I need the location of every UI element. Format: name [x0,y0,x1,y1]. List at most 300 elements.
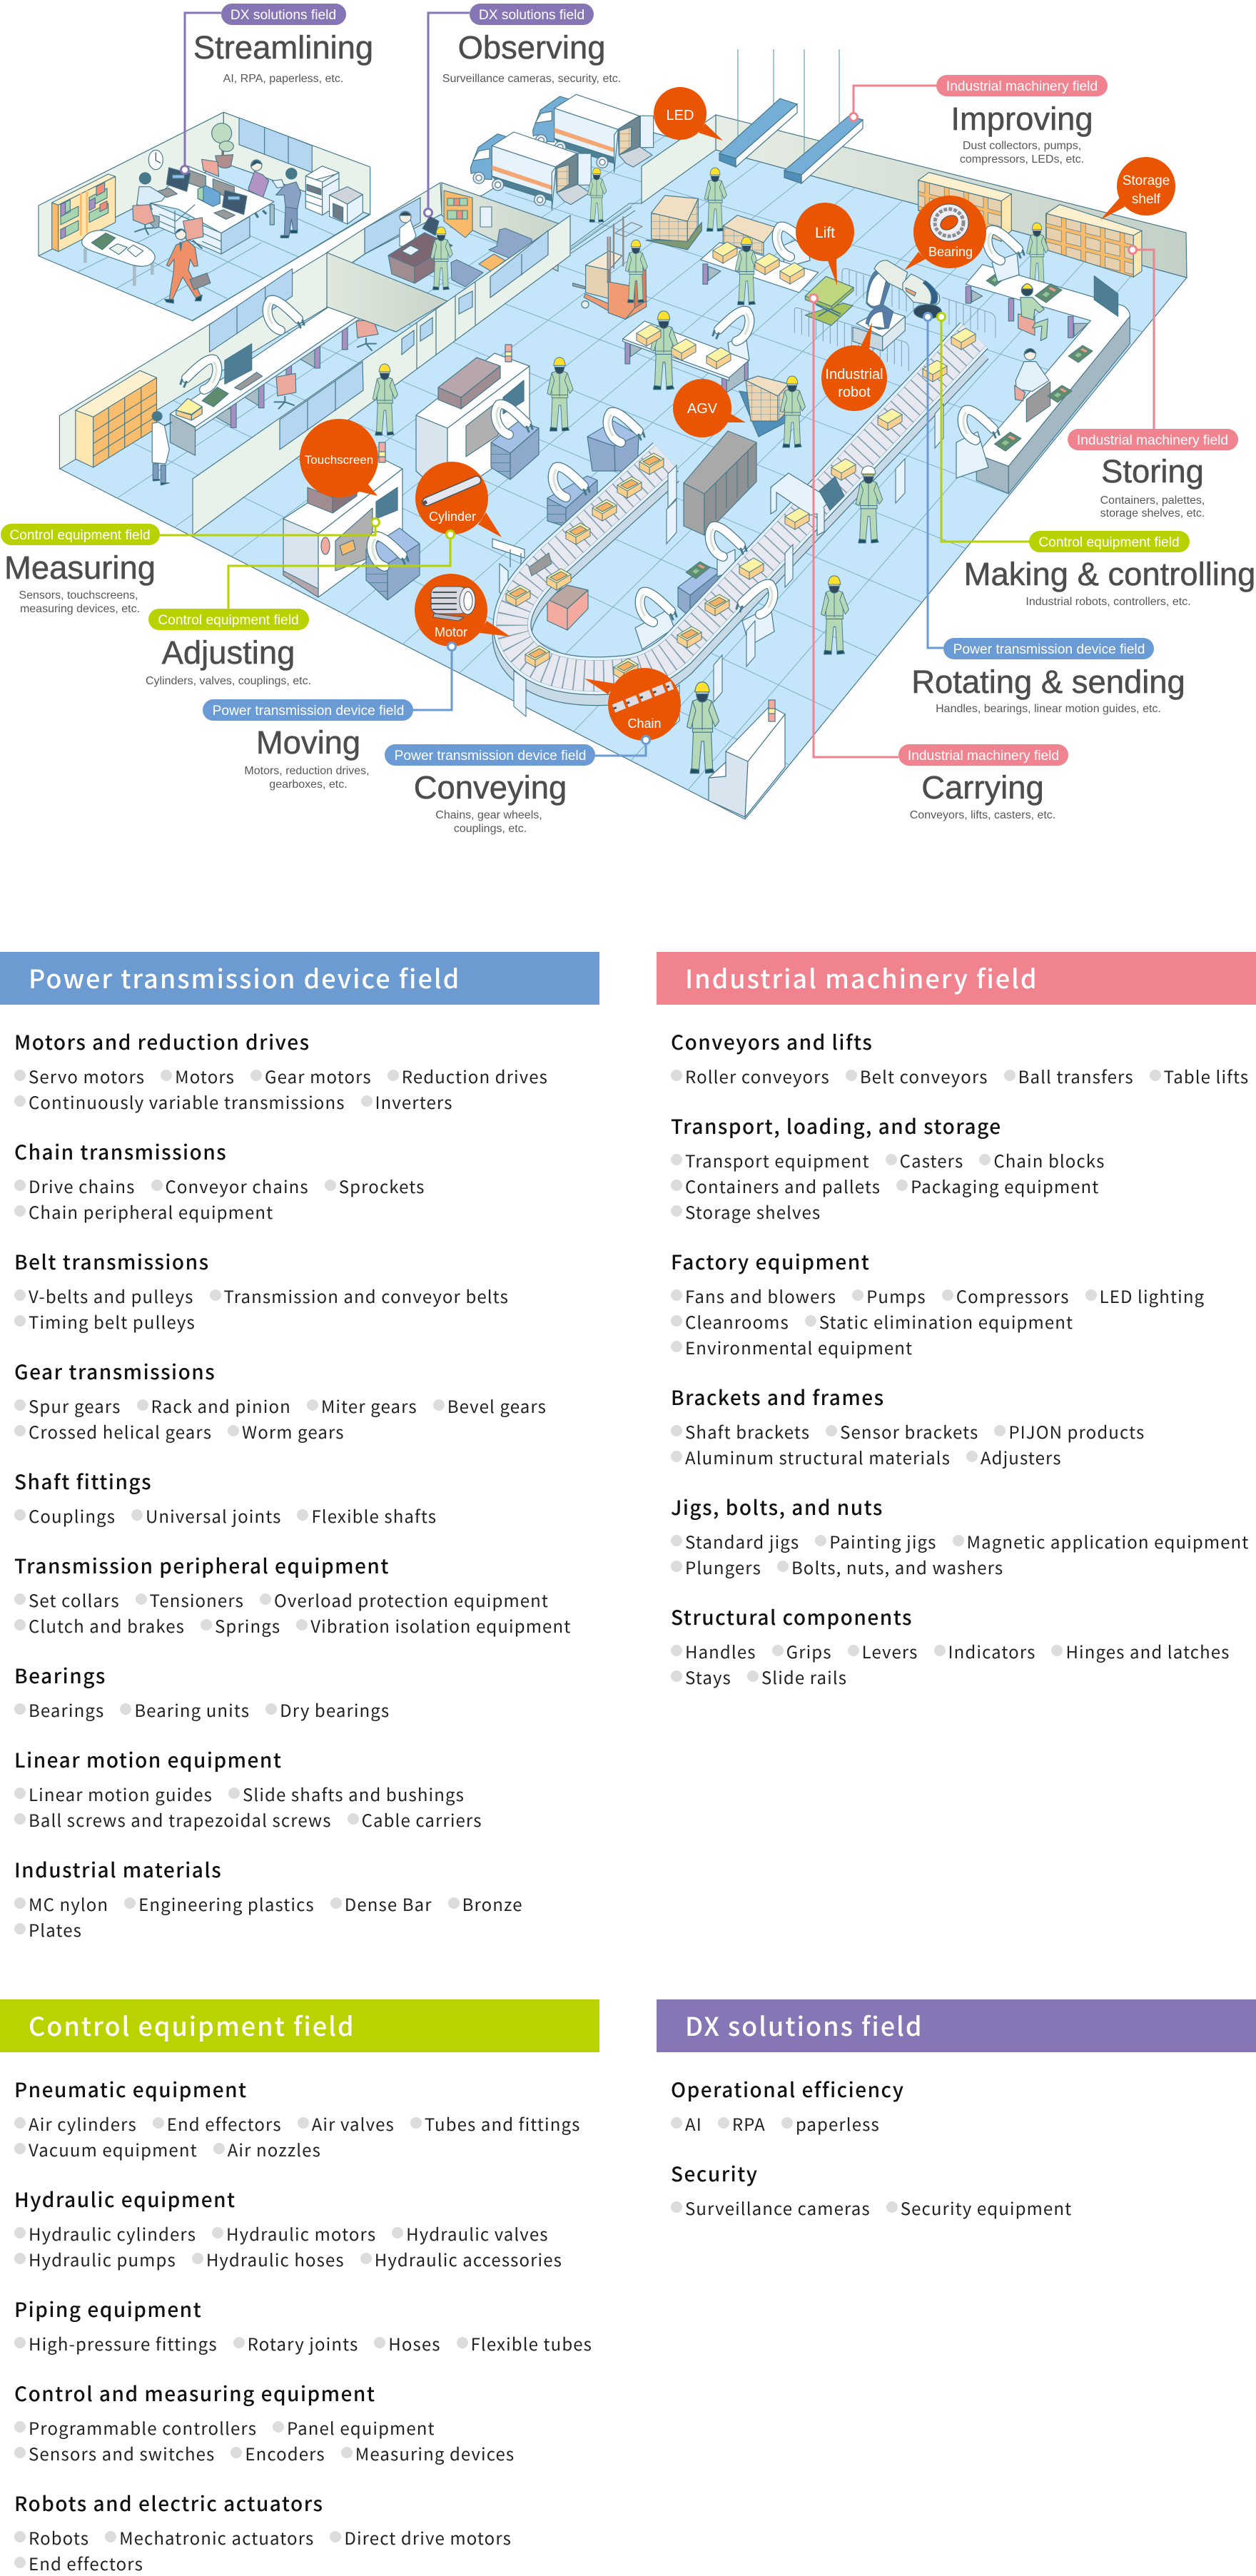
group: Transport, loading, and storage: Transport equipment [685,1147,870,1172]
group: Transport, loading, and storage: Packaging equipment [911,1173,1099,1198]
heading band: Industrial machinery field: Industrial machinery field [685,959,1038,996]
group: Pneumatic equipment: Tubes and fittings [425,2111,580,2136]
label: Adjusting: Adjusting [162,634,295,671]
group: Conveyors and lifts: Conveyors and lifts [671,1028,873,1056]
machine lower [283,457,402,597]
factory illustration [1,4,1255,835]
group: Motors and reduction drives: Continuously variable transmissions [29,1089,345,1114]
back wall [716,115,1187,278]
office walls [39,112,223,256]
group: Brackets and frames: Adjusters [981,1444,1062,1469]
sensor bar [492,539,525,599]
PCB stack stand [678,566,721,617]
label: Rotating and sending: Handles, bearings, linear motion guides, etc. [936,703,1161,715]
group: Jigs, bolts, and nuts: Painting jigs [829,1528,937,1553]
group: Motors and reduction drives [14,1028,548,1114]
label: Rotating and sending [911,638,1185,715]
group: Bearings: Bearing units [134,1697,250,1722]
callout: Chain [584,668,681,741]
copier [305,166,339,215]
worker in manager room [430,227,452,290]
board [1035,284,1062,303]
group: Chain transmissions: Sprockets [339,1173,425,1198]
group: Hydraulic equipment: Hydraulic valves [406,2221,549,2246]
label: Storing: Industrial machinery field [1077,433,1228,448]
callout: LED: LED [667,108,694,123]
front console [709,700,785,817]
lab arm 2 [181,359,217,390]
box [706,348,731,369]
group: Jigs, bolts, and nuts [671,1493,1249,1579]
group: Hydraulic equipment: Hydraulic equipment [14,2185,236,2214]
lab wall with doors [193,215,570,535]
loading bay wall [642,115,716,203]
pallet stack 2 [723,215,776,255]
label: Storing [1068,429,1238,519]
man in shirt [1015,349,1049,401]
group: Gear transmissions: Crossed helical gears [29,1419,212,1444]
plant [212,123,233,168]
group: Brackets and frames: Sensor brackets [840,1419,978,1444]
callout: Chain: Chain [627,716,662,731]
sample box [176,398,202,420]
group: Motors and reduction drives: Gear motors [265,1063,372,1088]
group: Chain transmissions: Chain transmissions [14,1137,227,1166]
label: Streamlining: DX solutions field [231,8,336,23]
group: Jigs, bolts, and nuts: Jigs, bolts, and nuts [671,1493,883,1521]
delivery trucks [470,94,654,210]
callout: LED [654,87,723,141]
group: Structural components: Indicators [948,1638,1035,1663]
callout: Lift: Lift [815,225,835,241]
office front edge [192,214,370,321]
industrial robot [866,260,941,330]
bookshelf [52,174,116,252]
label: Moving: Moving [256,724,360,761]
bookshelf [444,191,472,238]
group: Jigs, bolts, and nuts: Standard jigs [685,1528,799,1553]
arm [553,467,589,497]
callout: Storage shelf [1100,157,1175,220]
group: Gear transmissions: Spur gears [29,1393,121,1418]
group: Hydraulic equipment: Hydraulic cylinders [29,2221,196,2246]
label: Measuring: measuring devices, etc. [20,603,140,615]
heading band: Industrial machinery field [657,952,1256,1005]
wall panel [480,207,492,227]
arm [736,584,773,614]
group: Transmission peripheral equipment: Vibration isolation equipment [310,1613,571,1638]
group: Robots and electric actuators: Mechatronic actuators [119,2525,314,2550]
monitor [157,168,191,198]
label: Observing: Observing [458,29,605,66]
group: Brackets and frames: Shaft brackets [685,1419,810,1444]
group: Factory equipment: Cleanrooms [685,1309,789,1334]
table A [623,321,749,392]
office window [239,118,312,173]
bench boards [986,271,1007,286]
desks [151,166,274,254]
callout: Touchscreen: Touchscreen [305,453,373,467]
crop area: shelves, workbench, robot [918,173,1142,277]
group: Transport, loading, and storage: Containers and pallets [685,1173,881,1198]
group: Piping equipment: High-pressure fittings [29,2331,218,2356]
box [614,659,638,680]
sofa front [451,260,483,287]
box [739,558,764,579]
heading band: DX solutions field [657,1999,1256,2052]
label: Carrying: Industrial machinery field [908,749,1059,764]
lab back wall [59,252,328,469]
group: Hydraulic equipment: Hydraulic motors [226,2221,376,2246]
group: Robots and electric actuators: Robots and electric actuators [14,2489,324,2517]
label: Improving: Improving [951,101,1093,137]
group: Belt transmissions: V-belts and pulleys [29,1283,194,1308]
office room [39,112,370,320]
group: Industrial materials [14,1855,523,1942]
group: Security [671,2159,1072,2220]
heading band: Power transmission device field [0,952,599,1005]
group: Security: Security equipment [901,2195,1072,2220]
group: Belt transmissions: Transmission and conveyor belts [224,1283,509,1308]
gantry [771,473,844,535]
group: Factory equipment: Pumps [866,1283,926,1308]
box [713,242,737,263]
robot pedestal [853,309,905,351]
callout: Industrial robot: Industrial [825,367,883,382]
group: Transport, loading, and storage: Chain blocks [993,1147,1105,1172]
callout: Industrial robot: robot [838,385,871,400]
group: Hydraulic equipment: Hydraulic pumps [29,2246,176,2271]
conveyor legs [514,404,943,728]
group: Industrial materials: Engineering plastics [138,1891,315,1916]
bench [170,296,370,455]
roller conveyor [512,335,974,686]
lab robot arms [268,300,304,330]
group: Control and measuring equipment: Measuring devices [355,2440,515,2465]
group: Operational efficiency [671,2075,904,2136]
group: Security: Security [671,2159,759,2188]
board [995,432,1021,451]
label: Adjusting: Control equipment field [158,613,299,628]
group: Linear motion equipment: Linear motion guides [29,1781,213,1806]
server racks [684,431,756,535]
label: Improving: Dust collectors, pumps, [963,140,1081,152]
L bench legs [966,287,1073,338]
callout: Bearing [904,196,986,270]
group: Motors and reduction drives: Servo motors [29,1063,145,1088]
group: Transmission peripheral equipment [14,1551,571,1638]
manager room walls [327,183,558,280]
center monitors [189,170,234,200]
label: Conveying: Chains, gear wheels, [435,809,542,821]
shelf left [918,173,1011,241]
label: Improving [936,75,1108,166]
group: Robots and electric actuators: End effectors [29,2550,143,2575]
worker at table B [735,237,759,305]
label: Making and controlling: Control equipment field [1038,535,1180,550]
group: Control and measuring equipment: Control and measuring equipment [14,2379,375,2408]
group: Gear transmissions: Bevel gears [447,1393,547,1418]
binders [198,186,220,206]
arm [372,536,408,567]
callout: Motor: Motor [435,625,467,639]
storage cabinet [76,370,156,467]
group: Robots and electric actuators [14,2489,512,2575]
group: Control and measuring equipment: Panel equipment [287,2415,435,2440]
group: Brackets and frames: Aluminum structural materials [685,1444,951,1469]
label: Streamlining [193,4,373,85]
label: Improving: compressors, LEDs, etc. [960,153,1084,166]
group: Linear motion equipment: Slide shafts and bushings [243,1781,465,1806]
group: Factory equipment: Static elimination equipment [819,1309,1073,1334]
PCB stack [686,562,710,579]
group: Structural components: Hinges and latches [1065,1638,1230,1663]
group: Motors and reduction drives: Reduction drives [402,1063,548,1088]
group: Jigs, bolts, and nuts: Plungers [685,1554,761,1579]
list: DX solutions field [671,2075,1072,2220]
group: Linear motion equipment [14,1745,482,1832]
arm [988,230,1024,260]
group: Chain transmissions: Drive chains [29,1173,136,1198]
list: Power transmission device field [14,1028,571,1942]
label: Conveying: Conveying [414,769,567,806]
pink bin [547,585,588,630]
group: Transport, loading, and storage: Casters [900,1147,963,1172]
callout: Cylinder [415,462,502,537]
manager [400,211,416,246]
group: Transport, loading, and storage [671,1112,1105,1224]
label: Carrying: Conveyors, lifts, casters, etc. [910,809,1055,821]
group: Robots and electric actuators: Robots [29,2525,89,2550]
box [566,523,590,544]
group: Factory equipment: Environmental equipment [685,1334,913,1359]
arm [963,410,999,440]
man in orange suit [165,229,211,303]
label: Carrying [898,744,1068,821]
arm [710,526,746,557]
group: Robots and electric actuators: Direct drive motors [344,2525,512,2550]
box [617,477,642,498]
group: Control and measuring equipment: Sensors and switches [29,2440,215,2465]
group: Motors and reduction drives: Motors [175,1063,235,1088]
label: Carrying: Carrying [921,769,1044,806]
callout: AGV [673,379,746,437]
label: Adjusting [146,609,311,687]
machines [283,235,1019,649]
label: Making and controlling [964,531,1255,608]
group: Structural components: Stays [685,1664,731,1689]
lab window [210,269,293,352]
blue machine [491,421,539,480]
group: Hydraulic equipment: Hydraulic hoses [206,2246,345,2271]
group: Control and measuring equipment [14,2379,515,2465]
fence [794,268,996,371]
group: Factory equipment: Fans and blowers [685,1283,836,1308]
group: Factory equipment: Compressors [956,1283,1070,1308]
main factory floor [60,125,1187,819]
desk [388,233,452,283]
label: Conveying: couplings, etc. [454,823,527,835]
group: Control and measuring equipment: Encoders [245,2440,325,2465]
group: Pneumatic equipment [14,2075,580,2161]
group: Bearings: Dry bearings [280,1697,390,1722]
group: Factory equipment: Factory equipment [671,1247,870,1276]
callout: Storage shelf: shelf [1132,192,1161,207]
monitor [225,344,263,390]
meeting table [82,230,155,286]
group: Transport, loading, and storage: Storage shelves [685,1199,821,1224]
front chair [183,218,203,248]
callout: Motor [415,574,510,646]
group: Motors and reduction drives: Motors and reduction drives [14,1028,310,1056]
label: Observing: DX solutions field [479,8,584,23]
group: Belt transmissions: Belt transmissions [14,1247,210,1276]
group: Bearings: Bearings [29,1697,104,1722]
lab room [59,252,378,485]
forklift driver [625,240,647,303]
gray pusher [529,553,552,576]
group: Shaft fittings: Flexible shafts [311,1503,437,1528]
group: Pneumatic equipment: End effectors [167,2111,282,2136]
box [923,360,947,382]
pale pedestals [635,549,774,649]
clock [148,150,163,170]
heading band: Control equipment field [0,1999,599,2052]
group: Conveyors and lifts: Table lifts [1164,1063,1249,1088]
heading band: Power transmission device field: Power transmission device field [29,959,460,996]
callout: Industrial robot [821,323,887,411]
group: Gear transmissions [14,1357,547,1444]
bench legs [231,323,348,427]
group: Operational efficiency: paperless [796,2111,880,2136]
worker with tablet [373,364,397,435]
label: Measuring: Control equipment field [9,528,151,543]
group: Piping equipment: Flexible tubes [471,2331,592,2356]
group: Linear motion equipment: Linear motion equipment [14,1745,282,1774]
group: Pneumatic equipment: Air cylinders [29,2111,137,2136]
group: Chain transmissions [14,1137,425,1224]
blue machine [587,421,639,471]
forklift [573,216,647,319]
callout: AGV: AGV [687,401,718,417]
box [878,409,902,430]
board [202,387,228,407]
callout: Touchscreen [300,419,378,497]
group: Conveyors and lifts: Ball transfers [1018,1063,1134,1088]
label: Improving: Industrial machinery field [946,79,1098,94]
orange low table [479,254,505,271]
group: Pneumatic equipment: Air nozzles [228,2136,321,2161]
shredder [330,187,363,224]
group: Structural components: Handles [685,1638,756,1663]
arm [608,412,644,442]
group: Piping equipment: Hoses [388,2331,441,2356]
box [677,627,702,648]
label: Storing: Storing [1101,453,1204,490]
board [1068,345,1093,362]
label: Rotating and sending: Power transmission device field [953,642,1145,657]
group: Transport, loading, and storage: Transport, loading, and storage [671,1112,1002,1140]
group: Linear motion equipment: Ball screws and trapezoidal screws [29,1807,332,1832]
worker white helmet [856,466,883,543]
arm [777,226,814,257]
group: Piping equipment: Rotary joints [248,2331,358,2356]
table B [701,243,819,293]
worker inspector [547,358,573,431]
group: Belt transmissions [14,1247,509,1334]
callout: Bearing: Bearing [928,245,973,259]
label: Measuring: Sensors, touchscreens, [19,589,138,602]
group: Structural components: Grips [786,1638,832,1663]
label: Moving: Motors, reduction drives, [244,765,370,777]
arm [640,592,677,622]
falling box [547,569,571,590]
worker at shelf [1026,223,1048,285]
laptop [422,216,439,235]
seated man [133,173,166,235]
group: Structural components [671,1603,1230,1689]
worker at truck [587,168,607,222]
worker front [687,682,719,774]
L bench [966,265,1130,494]
label: Observing [442,4,621,85]
box [755,253,779,275]
blue machine [547,476,597,527]
callout: Cylinder: Cylinder [429,509,476,524]
label: Measuring [1,524,160,615]
group: Jigs, bolts, and nuts: Magnetic application equipment [967,1528,1249,1553]
group: Structural components: Structural components [671,1603,913,1631]
boxes on tables [637,325,661,346]
office floor [39,163,370,320]
heading band: Control equipment field: Control equipment field [29,2007,355,2044]
group: Pneumatic equipment: Vacuum equipment [29,2136,198,2161]
group: Industrial materials: Industrial materials [14,1855,222,1884]
group: Pneumatic equipment: Air valves [312,2111,395,2136]
group: Shaft fittings: Universal joints [146,1503,281,1528]
group: Conveyors and lifts [671,1028,1249,1088]
group: Operational efficiency: AI [685,2111,702,2136]
truck rear [533,94,654,172]
label: Observing: Surveillance cameras, security, etc. [442,73,621,85]
box [951,328,976,350]
sofa back [489,228,532,260]
LED lights [719,49,863,183]
box [506,585,530,607]
back chair [202,159,219,176]
group: Brackets and frames [671,1383,1145,1469]
group: Industrial materials: Bronze [462,1891,523,1916]
group: Transmission peripheral equipment: Transmission peripheral equipment [14,1551,390,1580]
group: Transmission peripheral equipment: Clutch and brakes [29,1613,185,1638]
conveyor boxes [639,453,664,475]
label: Storing: storage shelves, etc. [1100,507,1205,519]
group: Industrial materials: MC nylon [29,1891,108,1916]
box [780,263,804,284]
list: Industrial machinery field [671,1028,1249,1689]
group: Structural components: Slide rails [761,1664,847,1689]
label: Moving: Power transmission device field [213,704,404,719]
label: Moving [203,699,413,791]
group: Piping equipment [14,2295,592,2356]
list: Control equipment field [14,2075,592,2575]
bench monitor [1094,276,1118,316]
group: Bearings: Bearings [14,1661,106,1690]
group: Factory equipment: LED lighting [1100,1283,1205,1308]
group: Hydraulic equipment [14,2185,562,2271]
connector end points [181,113,1136,744]
signal tower [379,442,385,462]
